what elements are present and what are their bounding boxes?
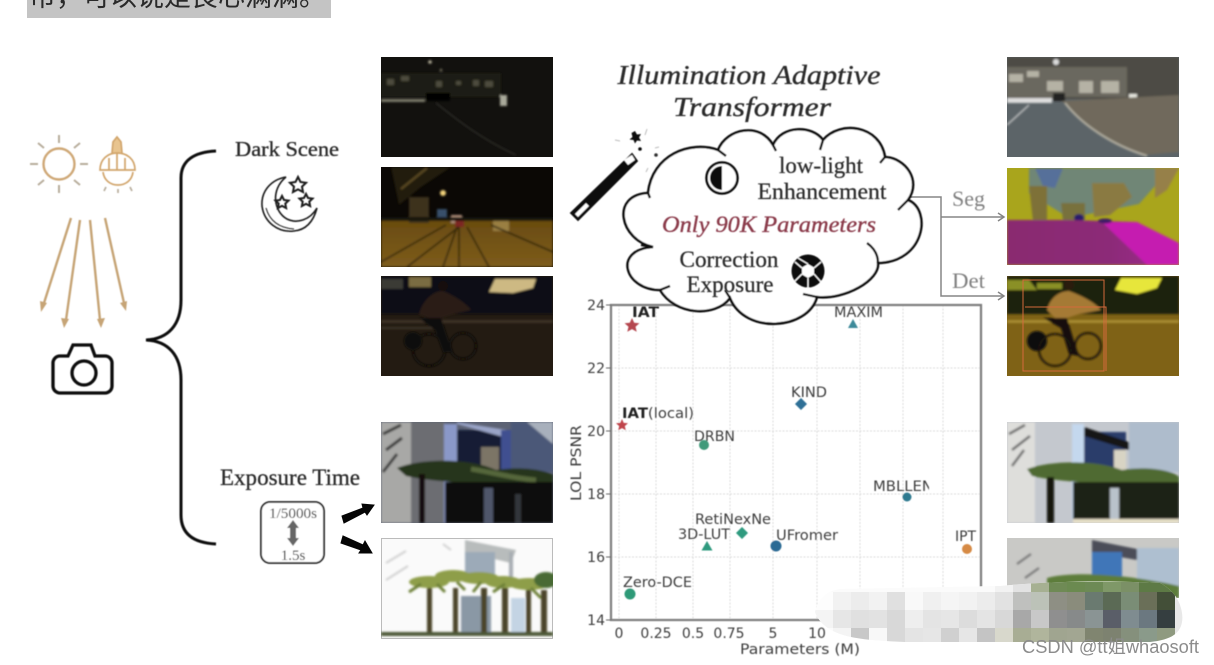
photo: dark street 2 [381,167,553,267]
x axis ticks: 0.25 [640,626,672,642]
connector: outputs to Seg and Det [908,197,1004,300]
brace [146,151,216,544]
y axis ticks: 24 [587,298,605,314]
photo: under-exposed building [381,422,553,523]
photo: corrected building 1 [1007,422,1179,523]
cloud [624,128,921,324]
x axis ticks: 0.5 [682,626,704,642]
cloud text: low-light Enhancement: low-light [779,153,864,178]
point: 3D-LUT [678,527,730,550]
point: IAT local: IAT(local) [622,406,694,422]
label: Det: Det [952,268,985,293]
label: Exposure Time: Exposure Time [220,465,360,490]
cloud text: low-light Enhancement: Enhancement [758,179,887,204]
photo: corrected building 2 [1007,538,1179,598]
photo: night cyclist [381,276,553,376]
point: IAT local [616,406,694,430]
title [616,60,881,122]
point: DRBN: DRBN [694,429,735,445]
point: UFromer [770,528,838,552]
exposure range box [261,502,324,564]
arrow: to over-exposed photo [341,536,372,553]
point: KIND: KIND [791,385,827,401]
axes frame [611,305,981,620]
icon: sun [30,135,88,193]
x axis ticks: 0.75 [713,626,745,642]
point: KIND [791,385,827,410]
grid lines [611,305,981,620]
point: Zero-DCE [623,575,692,600]
x axis ticks: 5 [769,626,777,642]
top caption bar [27,0,331,18]
y axis ticks: 16 [587,550,605,566]
point: IPT: IPT [955,529,976,545]
icon: camera [53,345,112,393]
point: RetiNexNet: RetiNexNe [695,512,771,528]
point: IPT [955,529,976,554]
cloud text: Correction Exposure: Exposure [686,272,774,297]
x axis ticks: 10 [808,626,826,642]
cloud text: Only 90K Parameters: Only 90K Parameters [662,212,876,237]
y axis ticks: 14 [587,613,605,629]
icon: moon and stars [262,177,317,231]
photo: dark street 1 [381,57,553,157]
x axis title: Parameters (M) [740,642,860,658]
label: Dark Scene: Dark Scene [235,137,339,161]
point: MAXIM [834,305,883,328]
privacy mosaic [815,581,1185,644]
scatter chart [569,298,981,658]
y axis ticks: 18 [587,487,605,503]
x axis ticks: 0 [615,626,623,642]
icon: contrast circle [706,162,738,194]
y axis ticks: 20 [587,424,605,440]
photo: segmentation output [1007,168,1179,265]
title: Transformer [673,92,832,122]
cloud text: Correction Exposure: Correction [680,247,779,272]
point: MAXIM: MAXIM [834,305,883,321]
cloud text: Correction Exposure [680,247,779,297]
icon: camera shutter [792,254,824,288]
y axis ticks: 22 [587,361,605,377]
x axis ticks [615,626,826,642]
arrow: to under-exposed photo [342,504,374,523]
point: MBLLEN [873,479,933,502]
photo: enhanced street [1007,57,1179,157]
arrows: light rays to camera [40,218,127,328]
label: Seg: Seg [952,186,985,211]
point: 3D-LUT: 3D-LUT [678,527,730,543]
point: IAT: IAT [632,305,659,321]
y axis ticks [587,298,611,629]
cloud text: low-light Enhancement [758,153,887,204]
point: UFromer: UFromer [776,528,838,544]
exposure range box: 1/5000s [269,506,317,522]
icon: magic wand [571,129,659,220]
point: Zero-DCE: Zero-DCE [623,575,692,591]
point: RetiNexNet [695,512,771,539]
title: Illumination Adaptive [616,60,881,90]
photo: detection output [1007,276,1179,376]
watermark: CSDN @tt姐whaosoft [1022,637,1199,657]
y axis title: LOL PSNR [569,425,585,501]
exposure range box: 1.5s [281,548,305,564]
photo: over-exposed building [381,538,553,639]
icon: light bulb [100,137,135,193]
point: IAT [625,305,659,332]
point: MBLLEN: MBLLEN [873,479,933,495]
